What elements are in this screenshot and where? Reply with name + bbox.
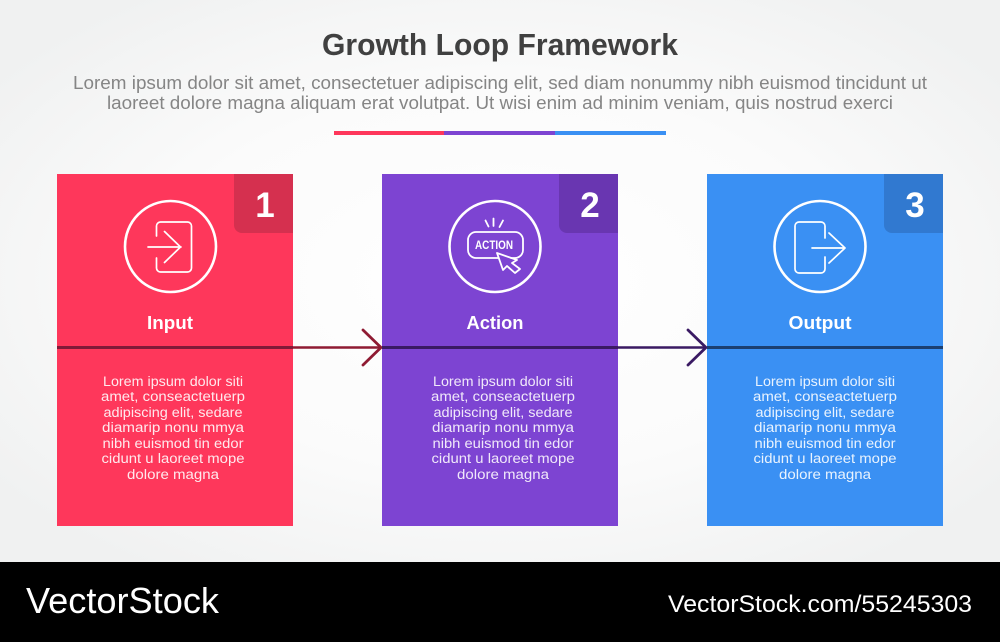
output body text: diamarip nonu mmya — [754, 420, 897, 435]
output body text: dolore magna — [779, 467, 872, 482]
footer bar — [0, 562, 1000, 642]
output body text: adipiscing elit, sedare — [756, 405, 894, 420]
input body text — [101, 374, 245, 482]
icon: enter door — [125, 201, 216, 292]
input heading: Input — [147, 313, 193, 333]
action body text: amet, conseactetuerp — [431, 389, 575, 404]
action body text: Lorem ipsum dolor siti — [433, 374, 573, 389]
arrow: input to action — [57, 330, 381, 365]
output heading: Output — [788, 313, 852, 333]
subtitle text — [73, 73, 927, 113]
input body text: adipiscing elit, sedare — [104, 405, 242, 420]
output body text: Lorem ipsum dolor siti — [755, 374, 895, 389]
output line — [707, 346, 943, 349]
action body text — [431, 374, 575, 482]
icon: exit door — [774, 201, 866, 292]
action body text: cidunt u laoreet mope — [432, 451, 574, 466]
output body text — [753, 374, 897, 482]
action body text: adipiscing elit, sedare — [434, 405, 572, 420]
input card background — [57, 174, 293, 526]
action number badge — [559, 174, 618, 233]
output card background — [707, 174, 943, 526]
output body text: cidunt u laoreet mope — [754, 451, 896, 466]
input body text: diamarip nonu mmya — [102, 420, 245, 435]
arrow: action to output — [382, 330, 706, 365]
icon: action button with cursor — [450, 201, 540, 292]
action body text: dolore magna — [457, 467, 550, 482]
input body text: dolore magna — [127, 467, 220, 482]
panel: output — [707, 174, 943, 526]
action heading: Action — [466, 313, 524, 333]
footer brand: VectorStock — [26, 580, 220, 621]
action card background — [382, 174, 618, 526]
action number badge: 2 — [580, 186, 600, 225]
panel: action — [382, 174, 618, 526]
icon: action button with cursor: ACTION — [475, 240, 513, 252]
output body text: nibh euismod tin edor — [754, 436, 896, 451]
tricolor divider — [334, 131, 666, 135]
action body text: nibh euismod tin edor — [432, 436, 574, 451]
subtitle text: Lorem ipsum dolor sit amet, consectetuer adipiscing elit, sed diam nonummy nibh euismod tincidunt ut — [73, 73, 927, 93]
action body text: diamarip nonu mmya — [432, 420, 575, 435]
input body text: cidunt u laoreet mope — [102, 451, 244, 466]
footer url: VectorStock.com/55245303 — [668, 591, 972, 618]
input number badge — [234, 174, 293, 233]
panel: input — [57, 174, 293, 526]
input number badge: 1 — [255, 186, 275, 225]
subtitle text: laoreet dolore magna aliquam erat volutpat. Ut wisi enim ad minim veniam, quis nostrud exerci — [107, 93, 893, 113]
output body text: amet, conseactetuerp — [753, 389, 897, 404]
input body text: nibh euismod tin edor — [102, 436, 244, 451]
input body text: Lorem ipsum dolor siti — [103, 374, 243, 389]
title: Growth Loop Framework — [322, 27, 679, 62]
output number badge: 3 — [905, 186, 925, 225]
input body text: amet, conseactetuerp — [101, 389, 245, 404]
output number badge — [884, 174, 943, 233]
